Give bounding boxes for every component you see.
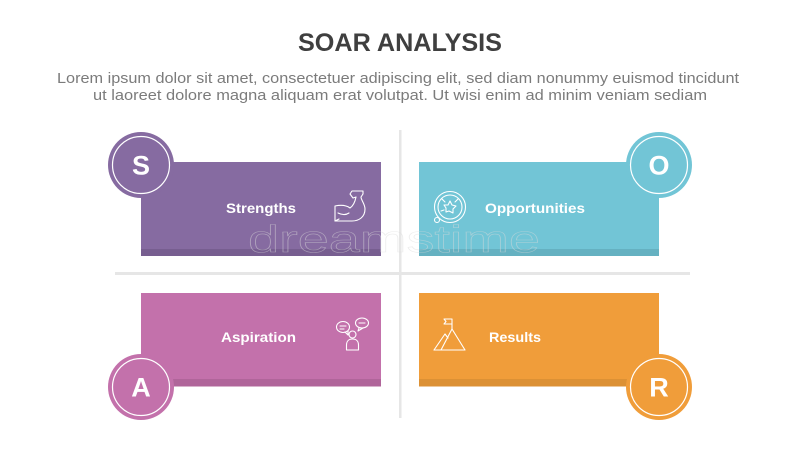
panel: aspiration [108, 293, 381, 420]
badge: A [108, 354, 174, 420]
subtitle text [57, 70, 740, 104]
label: Opportunities: Opportunities [485, 200, 585, 216]
icon: mountain with flag [434, 319, 465, 350]
subtitle text: Lorem ipsum dolor sit amet, consectetuer adipiscing elit, sed diam nonummy euismod tincidunt [57, 70, 740, 87]
watermark: dreamstime [248, 219, 540, 261]
label: Aspiration: Aspiration [221, 329, 296, 345]
icon: person with speech bubbles [336, 318, 368, 350]
panel: strengths [108, 132, 381, 256]
label: Strengths: Strengths [226, 200, 296, 216]
title: SOAR ANALYSIS [298, 29, 502, 57]
badge: O [626, 132, 692, 198]
badge: O: O [648, 150, 670, 180]
icon: flexed arm [335, 191, 365, 221]
panel: results [419, 293, 692, 420]
icon: compass badge [434, 192, 466, 222]
label: Results: Results [489, 329, 541, 345]
badge: R: R [649, 372, 669, 402]
panel: opportunities [419, 132, 692, 256]
badge: S: S [132, 150, 150, 180]
subtitle text: ut laoreet dolore magna aliquam erat volutpat. Ut wisi enim ad minim veniam sediam [93, 87, 707, 104]
badge: A: A [131, 372, 151, 402]
badge: S [108, 132, 174, 198]
badge: R [626, 354, 692, 420]
